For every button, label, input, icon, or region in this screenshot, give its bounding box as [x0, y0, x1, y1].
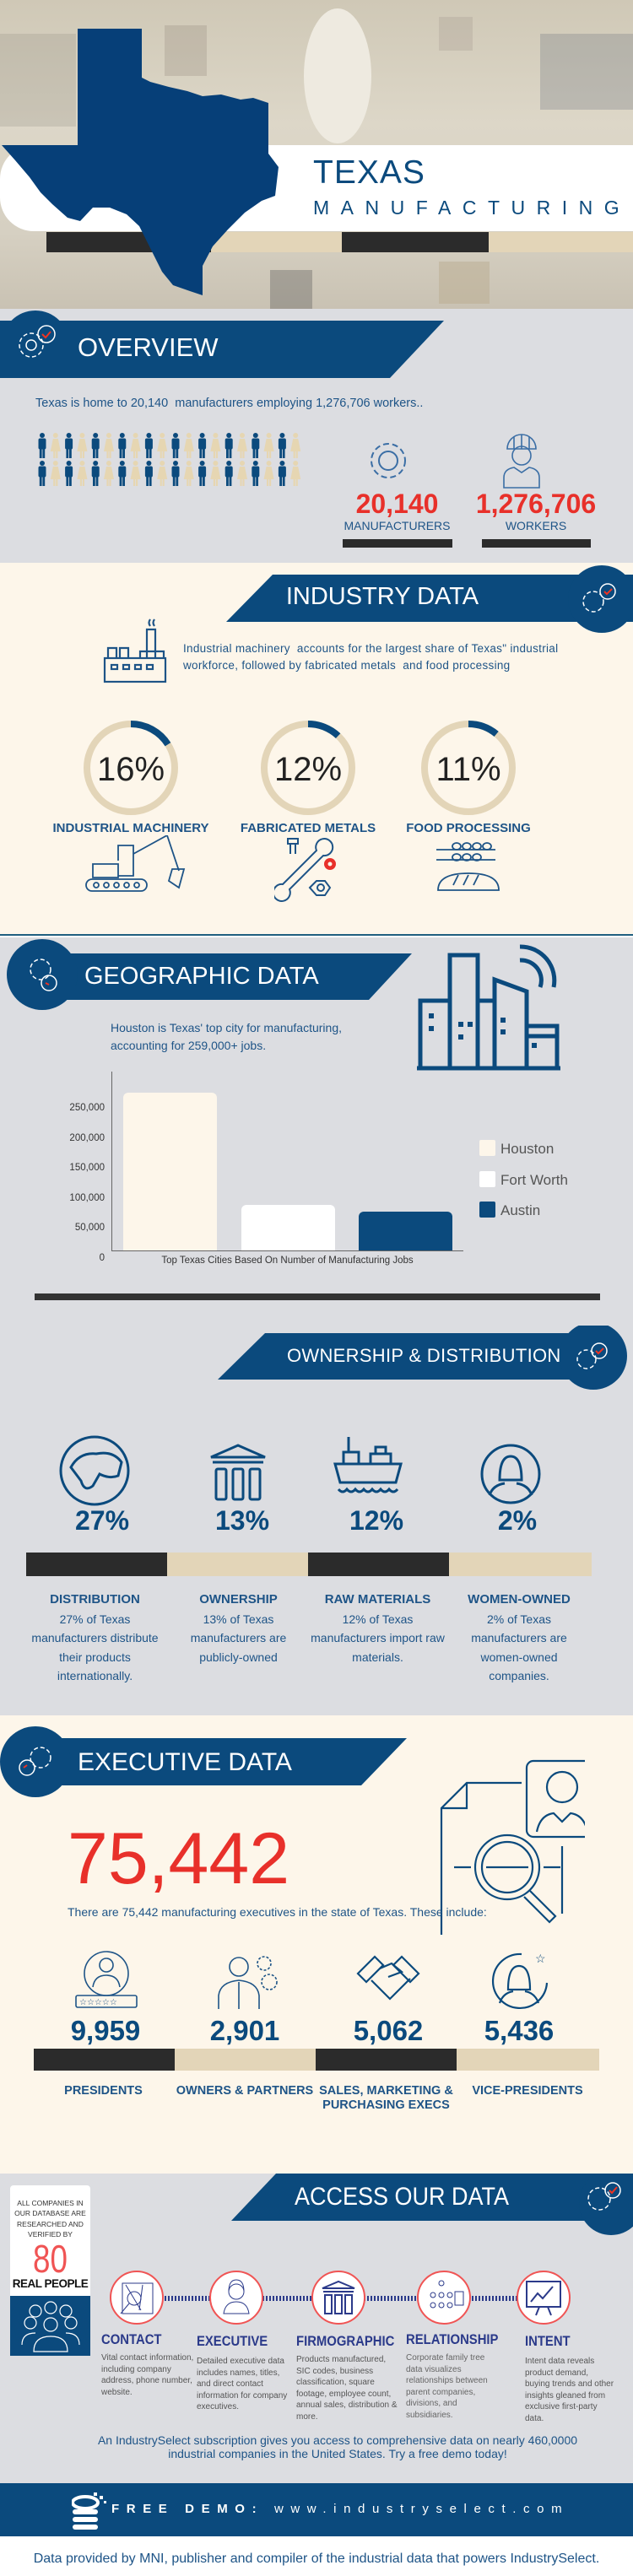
- heading: executive banner: EXECUTIVE DATA: [78, 1748, 292, 1776]
- icon: relationship circle: [416, 2270, 472, 2325]
- icon: president: [75, 1951, 138, 2008]
- legend: Houston: [500, 1141, 554, 1157]
- header bars: [46, 232, 633, 252]
- panel: geographic data: [0, 937, 633, 1326]
- text: contact: Vital contact information, including company address, phone number, website.: [101, 2353, 193, 2396]
- text: relationship: Corporate family tree data visualizes relationships between parent companies, divisions, and subsidiaries.: [406, 2353, 488, 2420]
- stat: 75,442: 75,442: [68, 1818, 289, 1899]
- title: TEXAS: [313, 154, 425, 191]
- icon: contact circle: [109, 2270, 165, 2325]
- stats: percentages: 27%: [75, 1505, 129, 1536]
- chart: donut industrial machinery: [52, 721, 209, 835]
- text: women-owned: WOMEN-OWNED: [468, 1592, 571, 1607]
- text: firmographic: Products manufactured, SIC codes, business classification, square footage, employee count, annual sales, distribution & more.: [296, 2355, 398, 2422]
- labels: executive roles: PRESIDENTS: [64, 2084, 143, 2098]
- text: industry summary: [183, 642, 558, 672]
- callout: 80 real people: VERIFIED BY: [28, 2230, 73, 2238]
- title: MANUFACTURING: [313, 197, 630, 219]
- icon: bread: [436, 842, 500, 891]
- icon: database logo: [72, 2491, 110, 2531]
- header: photo background: [0, 0, 633, 309]
- icon: wrench and bolts: [274, 838, 336, 902]
- heading: access banner: ACCESS OUR DATA: [295, 2183, 509, 2211]
- chart: donut industrial machinery: 16%: [97, 751, 165, 788]
- icon: texas map: [2, 29, 279, 295]
- icon: globe: [59, 1436, 130, 1505]
- stat: manufacturers: MANUFACTURERS: [344, 519, 451, 532]
- chart: donut fabricated metals: 12%: [274, 751, 342, 788]
- text: executive: EXECUTIVE: [197, 2334, 268, 2349]
- labels: executive roles: VICE-PRESIDENTS: [472, 2084, 583, 2098]
- chart: bar chart top cities: [69, 1072, 463, 1266]
- callout: 80 real people: 80: [33, 2237, 68, 2281]
- text: contact: [101, 2330, 196, 2398]
- text: firmographic: FIRMOGRAPHIC: [296, 2334, 394, 2349]
- stats: executive counts: 2,901: [210, 2015, 279, 2046]
- heading: industry data banner: INDUSTRY DATA: [286, 583, 479, 610]
- text: executive: Detailed executive data includes names, titles, and direct contact information for company executives.: [197, 2357, 287, 2411]
- icon: executive circle: [208, 2270, 264, 2325]
- icon: intent circle: [516, 2270, 571, 2325]
- text: data provided by: Data provided by MNI, publisher and compiler of the industrial data that powers IndustrySelect.: [34, 2552, 599, 2566]
- chart: bar chart top cities: 0: [100, 1253, 105, 1263]
- heading: access banner: [231, 2174, 633, 2237]
- text: relationship: [406, 2330, 503, 2421]
- icon: handshake: [356, 1956, 420, 2000]
- heading: ownership banner: [218, 1326, 627, 1390]
- text: women-owned: 2% of Texas manufacturers are women-owned companies.: [471, 1612, 567, 1682]
- text: executive summary: There are 75,442 manufacturing executives in the state of Texas. These include:: [68, 1905, 487, 1919]
- chart: bar chart top cities: 250,000: [69, 1103, 105, 1113]
- chart: people pictogram: [39, 433, 300, 486]
- icon: cargo ship: [333, 1437, 403, 1493]
- heading: geographic banner: [7, 939, 412, 1010]
- text: free demo url: FREE DEMO: www.industryselect.com: [111, 2502, 569, 2516]
- callout: 80 real people: [10, 2185, 90, 2356]
- text: intent: Intent data reveals product demand, buying trends and other insights gleaned from exclusive first-party data.: [525, 2357, 614, 2423]
- panel: executive data: [0, 1715, 633, 2174]
- text: executive: [197, 2332, 295, 2413]
- icon: vice president: ☆: [535, 1952, 546, 1965]
- connector dots: [165, 2296, 517, 2301]
- icon: firmographic circle: [311, 2270, 366, 2325]
- text: intent: INTENT: [525, 2334, 571, 2349]
- legend: Fort Worth: [500, 1171, 568, 1188]
- callout: 80 real people: ALL COMPANIES IN: [17, 2199, 84, 2207]
- icon: woman in circle: [481, 1445, 540, 1504]
- stats: percentages: 12%: [349, 1505, 403, 1536]
- text: raw materials: RAW MATERIALS: [325, 1592, 430, 1607]
- bar: segmented: [34, 2049, 599, 2071]
- icon: worker: [503, 434, 540, 489]
- stat: workers: [476, 489, 596, 548]
- chart: bar chart top cities: 50,000: [75, 1223, 105, 1233]
- legend: [479, 1140, 568, 1218]
- heading: overview banner: OVERVIEW: [78, 332, 219, 362]
- chart: donut food processing: 11%: [436, 751, 501, 788]
- stat: manufacturers: 20,140: [356, 489, 438, 519]
- stats: executive counts: 5,062: [354, 2015, 423, 2046]
- chart: bar chart top cities: 200,000: [69, 1133, 105, 1143]
- text: industry summary: workforce, followed by fabricated metals and food processing: [183, 659, 510, 672]
- text: overview summary: Texas is home to 20,140 manufacturers employing 1,276,706 workers..: [35, 397, 423, 410]
- legend: Austin: [500, 1202, 540, 1218]
- text: raw materials: 12% of Texas manufacturers import raw materials.: [311, 1612, 445, 1664]
- text: distribution: DISTRIBUTION: [50, 1592, 140, 1607]
- chart: bar chart top cities: 100,000: [69, 1193, 105, 1203]
- labels: executive roles: OWNERS & PARTNERS: [176, 2084, 313, 2098]
- labels: executive roles: PURCHASING EXECS: [322, 2098, 450, 2112]
- stats: percentages: [75, 1505, 537, 1536]
- chart: donut fabricated metals: [241, 721, 376, 835]
- bar: segmented: [26, 1553, 592, 1576]
- icon: president: ☆☆☆☆☆: [79, 1998, 117, 2007]
- stat: manufacturers: [343, 489, 452, 548]
- chart: bar chart top cities: Top Texas Cities Based On Number of Manufacturing Jobs: [161, 1256, 414, 1266]
- header white band: [0, 145, 633, 231]
- heading: geographic banner: GEOGRAPHIC DATA: [84, 963, 319, 990]
- text: subscription pitch: An IndustrySelect subscription gives you access to comprehensive data on nearly 460,0000 industrial companies in the United States. Try a free demo today!: [98, 2433, 577, 2460]
- chart: donut food processing: [406, 721, 531, 835]
- icon: document with magnifier: [441, 1760, 585, 1935]
- text: ownership: 13% of Texas manufacturers are publicly-owned: [191, 1612, 286, 1664]
- chart: donut industrial machinery: INDUSTRIAL MACHINERY: [52, 821, 209, 835]
- text: houston summary: Houston is Texas' top city for manufacturing,: [111, 1021, 342, 1034]
- text: houston summary: [111, 1021, 342, 1052]
- text: relationship: RELATIONSHIP: [406, 2332, 498, 2347]
- chart: donut food processing: FOOD PROCESSING: [406, 821, 531, 835]
- text: houston summary: accounting for 259,000+ jobs.: [111, 1039, 266, 1052]
- icon: city buildings: [417, 945, 560, 1070]
- icon: building columns: [210, 1444, 266, 1500]
- chart: donut fabricated metals: FABRICATED METALS: [241, 821, 376, 835]
- icon: factory: [103, 618, 167, 683]
- icon: owners: [218, 1956, 278, 2009]
- panel: ownership & distribution: [0, 1326, 633, 1715]
- heading: executive banner: [0, 1726, 407, 1797]
- panel: access our data: [0, 2174, 633, 2483]
- callout: 80 real people: OUR DATABASE ARE: [14, 2209, 86, 2217]
- text: contact: CONTACT: [101, 2332, 161, 2347]
- text: distribution: 27% of Texas manufacturers distribute their products internationally.: [31, 1612, 159, 1682]
- text: industry summary: Industrial machinery accounts for the largest share of Texas" industrial: [183, 642, 558, 655]
- chart: bar chart top cities: 150,000: [69, 1163, 105, 1173]
- stat: workers: 1,276,706: [476, 489, 596, 519]
- panel: overview: [0, 309, 633, 563]
- stat: workers: WORKERS: [506, 519, 566, 532]
- footer: free demo: [0, 2483, 633, 2536]
- stats: percentages: 2%: [498, 1505, 537, 1536]
- callout: 80 real people: REAL PEOPLE: [13, 2277, 88, 2290]
- stats: executive counts: 5,436: [484, 2015, 554, 2046]
- heading: overview banner: [0, 311, 444, 378]
- callout: 80 real people: RESEARCHED AND: [17, 2220, 84, 2228]
- stats: executive counts: [34, 2015, 599, 2049]
- text: ownership: OWNERSHIP: [199, 1592, 278, 1607]
- stats: percentages: 13%: [215, 1505, 269, 1536]
- icon: gear: [371, 443, 406, 478]
- panel: industry data: [0, 563, 633, 936]
- icon: excavator: [85, 835, 186, 892]
- labels: executive roles: [34, 2084, 608, 2126]
- stats: executive counts: 9,959: [71, 2015, 140, 2046]
- icon: vice president: [491, 1952, 549, 2009]
- title: [313, 154, 630, 219]
- heading: industry data banner: [226, 565, 633, 633]
- labels: executive roles: SALES, MARKETING &: [319, 2084, 453, 2098]
- heading: ownership banner: OWNERSHIP & DISTRIBUTION: [287, 1345, 561, 1366]
